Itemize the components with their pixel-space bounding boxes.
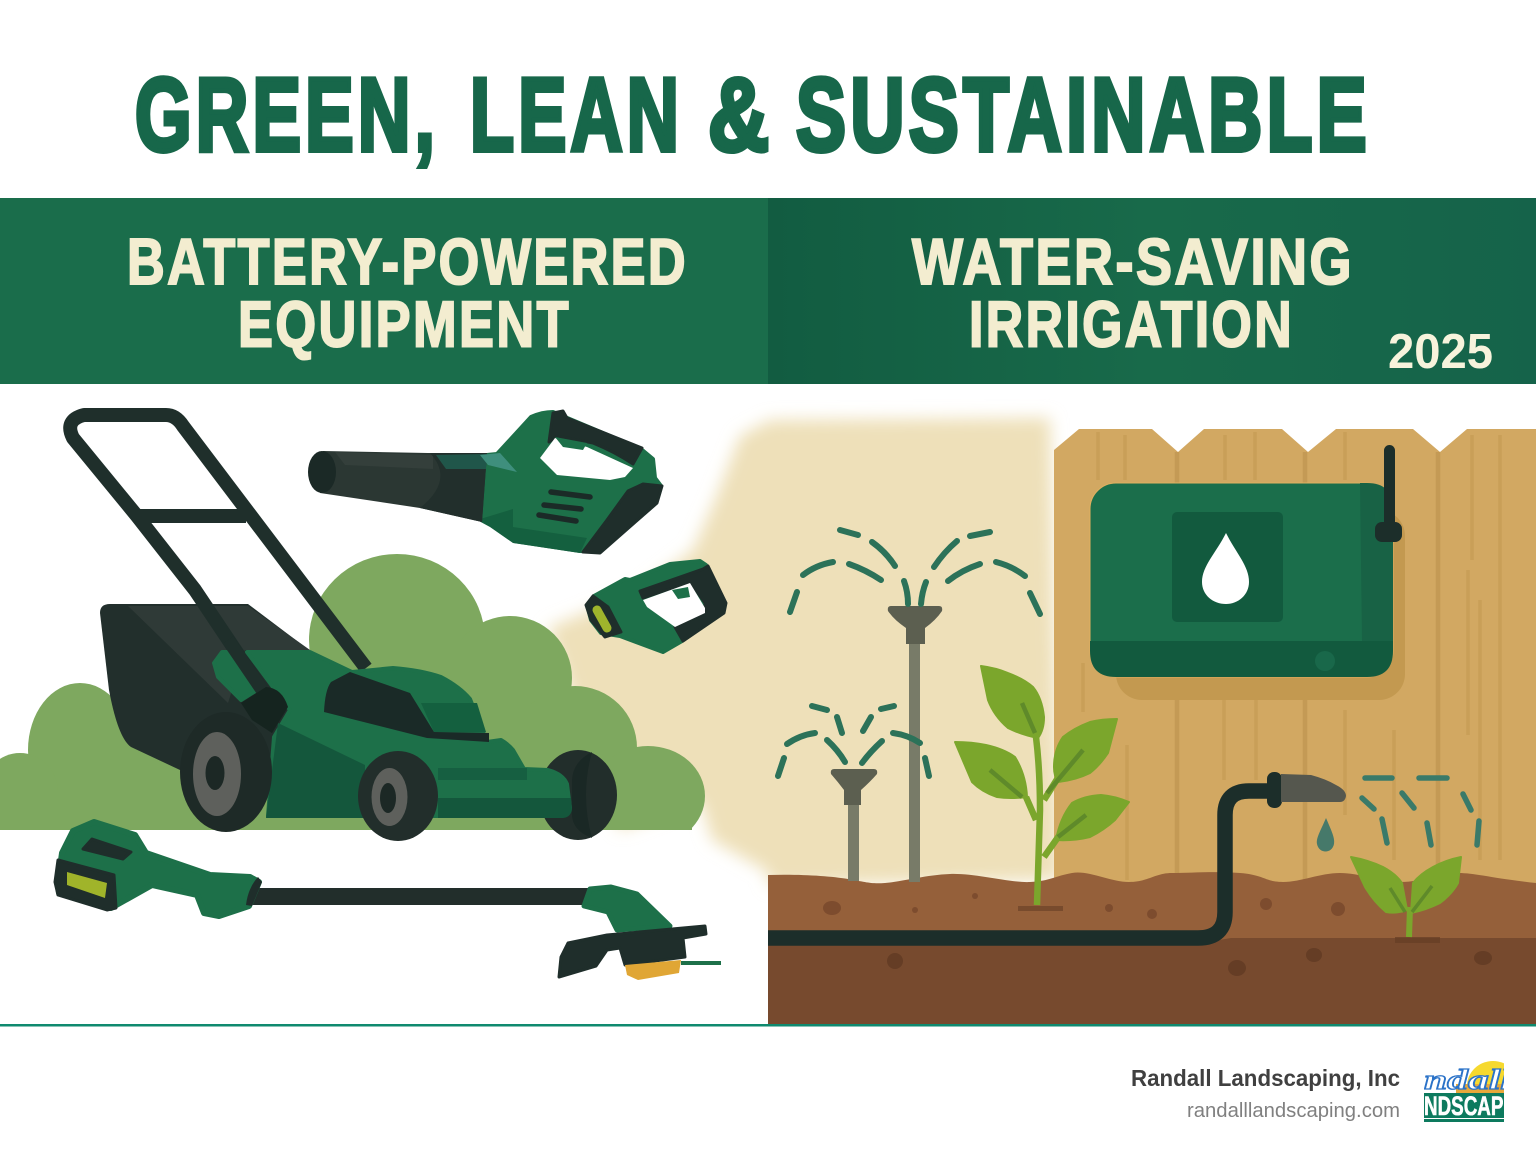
company name: Randall Landscaping, Inc <box>1131 1065 1400 1091</box>
blower tube <box>320 451 487 522</box>
far front wheel <box>539 750 617 840</box>
trimmer head <box>584 887 670 930</box>
rear wheel <box>180 687 288 832</box>
mower handle <box>70 415 366 690</box>
controller shadow <box>1116 510 1405 700</box>
company logo: ndall <box>1424 1065 1512 1096</box>
heading: battery-powered equipment <box>127 225 688 360</box>
hose nozzle <box>1281 774 1346 802</box>
trimmer shaft <box>252 888 592 905</box>
title: GREEN, <box>135 58 439 174</box>
short sprinkler <box>778 706 929 881</box>
drip water <box>1317 778 1479 852</box>
tall sprinkler spray <box>790 530 1040 614</box>
blower vents <box>539 492 590 521</box>
drip hose <box>768 772 1346 938</box>
title: LEAN <box>470 58 683 174</box>
tall sprinkler <box>790 530 1040 882</box>
soil <box>768 872 1536 1024</box>
blower handle <box>549 411 642 464</box>
company website: randalllandscaping.com <box>1187 1100 1400 1122</box>
grass bag <box>100 604 313 775</box>
heading: water-saving irrigation <box>912 225 1354 360</box>
string trimmer <box>55 822 721 980</box>
bushes <box>0 554 705 846</box>
tall plant <box>955 666 1129 905</box>
blower battery <box>583 484 662 553</box>
heading: water-saving irrigation: IRRIGATION <box>969 288 1294 360</box>
controller box <box>1090 445 1405 700</box>
heading: battery-powered equipment: EQUIPMENT <box>238 288 571 360</box>
blower body <box>479 412 661 552</box>
title <box>135 58 1371 174</box>
fence <box>1054 429 1536 900</box>
header band <box>0 198 1536 384</box>
battery pack <box>586 561 726 652</box>
short sprinkler spray <box>778 706 929 776</box>
antenna <box>1375 445 1402 542</box>
water drop icon <box>1172 512 1283 622</box>
heading: water-saving irrigation: WATER-SAVING <box>912 225 1354 298</box>
front wheel <box>358 751 438 841</box>
leaf blower <box>308 411 662 553</box>
cream background wash <box>548 418 1060 885</box>
engine cover <box>324 672 489 742</box>
mower deck <box>247 652 570 816</box>
trimmer motor housing <box>58 822 259 916</box>
heading: battery-powered equipment: BATTERY-POWERED <box>127 225 688 298</box>
company logo <box>1424 1061 1504 1122</box>
title: & <box>708 58 774 174</box>
far wheel shading <box>572 752 592 838</box>
small plant <box>1351 857 1461 937</box>
footer rule <box>0 1024 1536 1026</box>
lawn mower <box>70 415 617 841</box>
year label: 2025 <box>1388 325 1493 379</box>
